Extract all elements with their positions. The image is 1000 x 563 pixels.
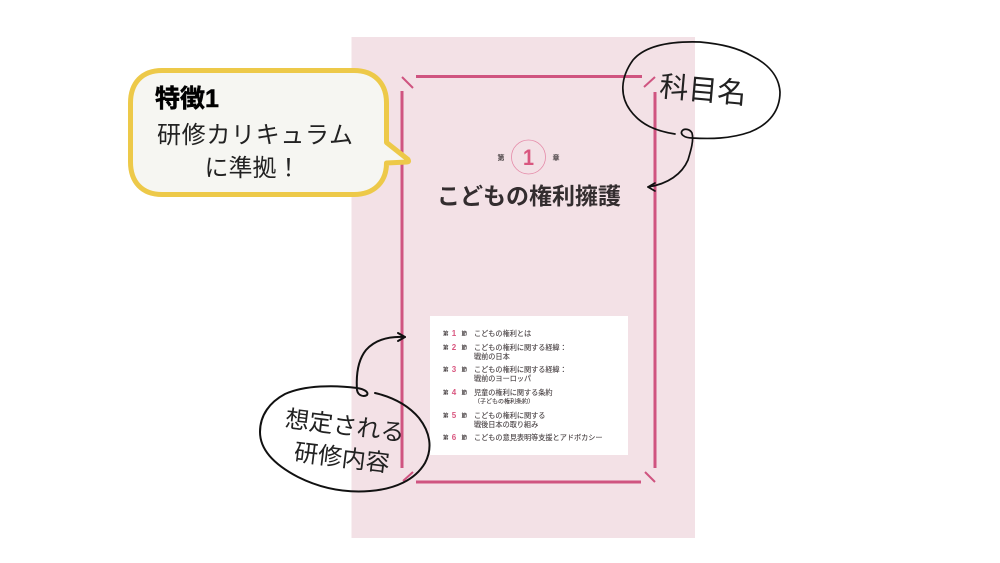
label: expected training content line 1: 想定される xyxy=(284,406,406,447)
section 6: 6 xyxy=(452,433,457,442)
section 2: 節 xyxy=(462,344,468,352)
label: subject name: 科目名 xyxy=(658,70,748,111)
frame: page border lines xyxy=(402,76,655,482)
section 3: 3 xyxy=(452,365,457,374)
section 6: 節 xyxy=(462,434,468,442)
section 3 xyxy=(443,365,567,383)
section 5: 5 xyxy=(452,411,457,420)
panel: book page xyxy=(352,37,695,538)
section 1: 1 xyxy=(452,329,457,338)
section 5: 戦後日本の取り組み xyxy=(474,420,538,429)
panel: table of contents xyxy=(430,316,628,455)
section 4: 第 xyxy=(443,388,449,396)
section 2: 戦前の日本 xyxy=(474,352,510,361)
chapter number badge xyxy=(498,140,560,174)
section 5: 第 xyxy=(443,412,449,420)
callout: feature 1 speech bubble xyxy=(130,70,409,194)
section 3: 戦前のヨーロッパ xyxy=(474,374,531,383)
section 4: （子どもの権利条約） xyxy=(474,398,534,406)
callout text line 2: に準拠！ xyxy=(204,155,300,182)
chapter number badge: 章 xyxy=(552,153,560,162)
annotation: subject name oval and arrow xyxy=(623,42,780,191)
section 1: こどもの権利とは xyxy=(474,329,531,338)
section 3: 節 xyxy=(462,366,468,374)
section 1 xyxy=(443,329,531,338)
chapter number badge: 第 xyxy=(498,153,504,162)
section 3: こどもの権利に関する経緯： xyxy=(474,365,567,374)
callout text line 1: 研修カリキュラム xyxy=(157,122,353,149)
callout heading: 特徴1 xyxy=(155,85,219,113)
section 6: 第 xyxy=(443,434,449,442)
section 2: 2 xyxy=(452,343,457,352)
section 2: こどもの権利に関する経緯： xyxy=(474,343,567,352)
section 4: 4 xyxy=(452,388,457,397)
section 4: 節 xyxy=(462,388,468,396)
section 2: 第 xyxy=(443,344,449,352)
section 4: 児童の権利に関する条約 xyxy=(474,388,553,397)
label: expected training content line 2: 研修内容 xyxy=(293,439,391,478)
section 6: こどもの意見表明等支援とアドボカシー xyxy=(474,433,603,442)
section 3: 第 xyxy=(443,366,449,374)
chapter number badge: 1 xyxy=(523,146,534,170)
section 1: 第 xyxy=(443,330,449,338)
section 5: こどもの権利に関する xyxy=(474,411,545,420)
chapter title: こどもの権利擁護 xyxy=(437,183,621,209)
section 5: 節 xyxy=(462,412,468,420)
section 5 xyxy=(443,411,545,429)
annotation: expected training content oval and arrow xyxy=(260,333,430,491)
section 2 xyxy=(443,343,567,361)
section 1: 節 xyxy=(462,330,468,338)
section 4 xyxy=(443,388,553,406)
